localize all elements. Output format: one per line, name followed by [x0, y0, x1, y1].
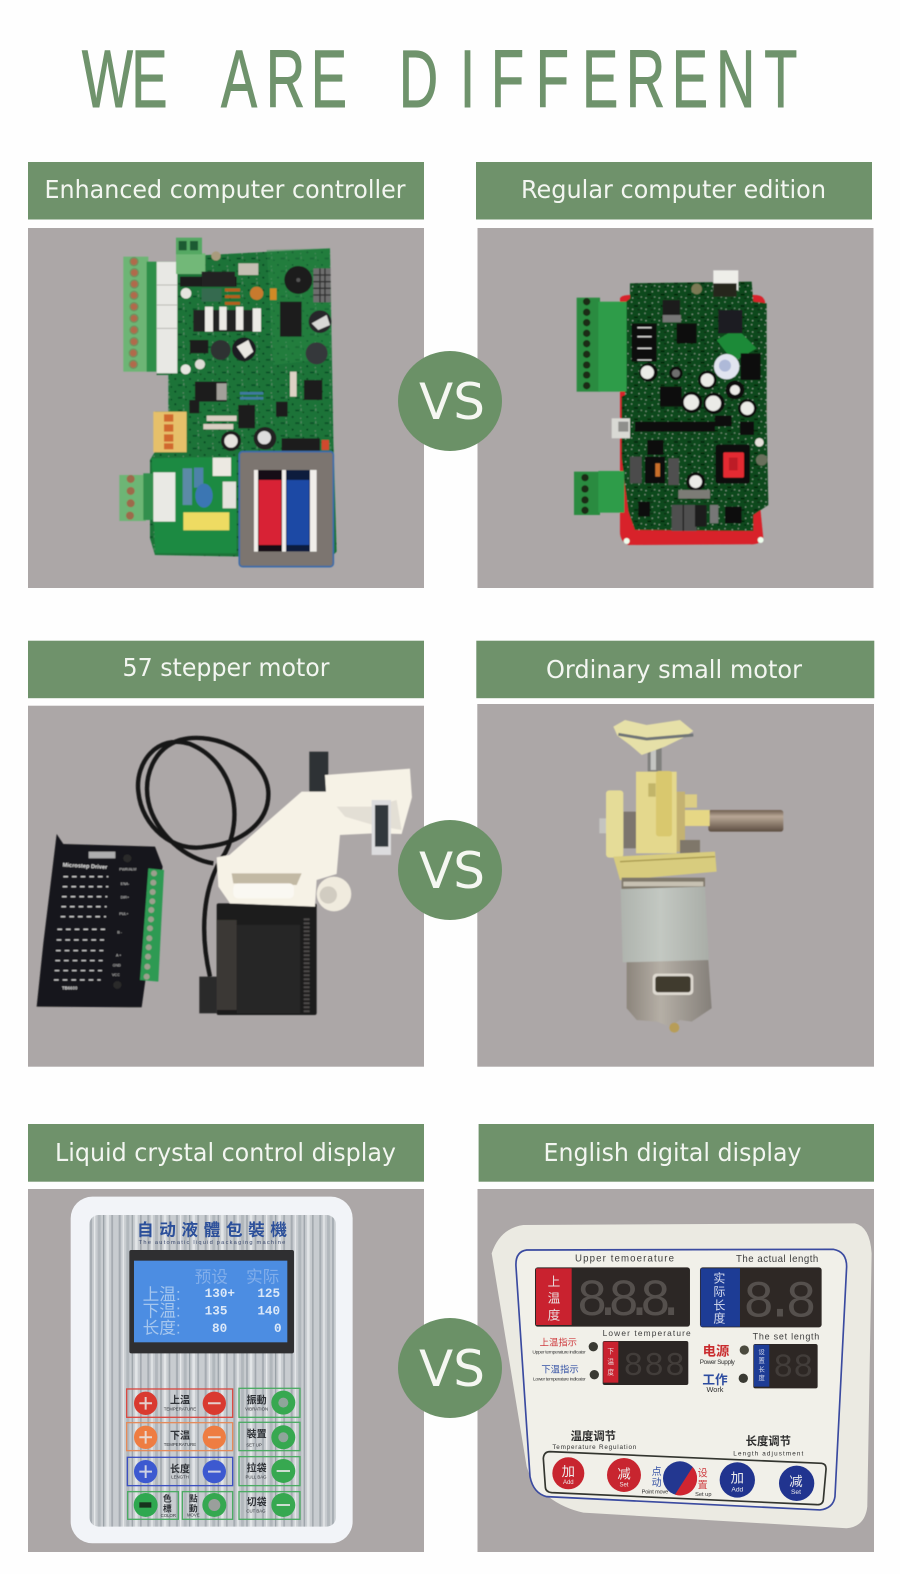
- adjustment buttons: Set up: [695, 1492, 711, 1498]
- header: Ordinary small motor: Ordinary small motor: [546, 655, 803, 684]
- panel: enhanced controller photo background: [28, 228, 424, 588]
- adjustment buttons: Set: [791, 1489, 801, 1496]
- icon: ordinary small motor: [599, 720, 783, 1033]
- actual length display: The actual length: [736, 1254, 818, 1265]
- VS badge row 1: [398, 351, 502, 451]
- lower temperature display: 温: [607, 1357, 614, 1366]
- header: Regular computer edition: Regular computer edition: [521, 175, 826, 204]
- panel: LCD photo background: [28, 1189, 424, 1552]
- actual length display: 实: [713, 1271, 725, 1286]
- LCD control panel: [71, 1197, 353, 1543]
- LCD screen: 长度:: [143, 1319, 181, 1338]
- actual length display: 际: [713, 1285, 725, 1299]
- panel: stepper motor photo background: [28, 706, 424, 1067]
- digital display panel: [492, 1223, 872, 1528]
- LCD buttons: 长度: [170, 1462, 190, 1475]
- panel: small motor photo background: [477, 704, 874, 1067]
- LCD buttons: 下温: [170, 1429, 190, 1442]
- VS badge row 1: VS: [419, 373, 485, 431]
- LCD screen: 125: [257, 1286, 280, 1301]
- header: Enhanced computer controller: [28, 162, 424, 220]
- adjustment buttons: Point move: [642, 1490, 668, 1496]
- adjustment labels: 长度调节: [746, 1434, 791, 1448]
- set length display: 长: [758, 1364, 765, 1373]
- VS badge row 3: VS: [419, 1340, 485, 1398]
- indicator labels: [532, 1336, 749, 1394]
- actual length display: 长: [713, 1298, 725, 1312]
- header: Regular computer edition: [476, 162, 872, 220]
- stepper driver: Microstep Driver: [63, 863, 108, 871]
- adjustment buttons: 点: [652, 1466, 662, 1478]
- header: 57 stepper motor: 57 stepper motor: [122, 653, 330, 682]
- set length display: 置: [758, 1357, 765, 1365]
- adjustment buttons: 减: [789, 1474, 803, 1489]
- lower temperature display: 888: [623, 1348, 685, 1386]
- LCD buttons: SET UP: [246, 1442, 262, 1447]
- LCD buttons: 色: [163, 1493, 172, 1504]
- lower temperature display: Lower temperature: [603, 1328, 691, 1338]
- indicator labels: Lower temperature indicator: [533, 1377, 586, 1383]
- VS badge row 2: VS: [419, 842, 485, 900]
- VS badge row 3: [398, 1318, 502, 1418]
- motor cable: [138, 738, 268, 977]
- lower temperature display: 度: [607, 1368, 614, 1377]
- LCD screen: 预设: [195, 1267, 228, 1286]
- stepper driver: A +: [116, 954, 121, 958]
- icon: regular circuit board: [574, 270, 768, 545]
- header: Enhanced computer controller: Enhanced computer controller: [44, 175, 406, 204]
- indicator labels: Work: [706, 1385, 724, 1394]
- LCD screen: 130+: [205, 1286, 235, 1301]
- stepper driver: ENA-: [121, 882, 130, 886]
- LCD buttons: [127, 1388, 300, 1519]
- panel: regular controller photo background: [478, 228, 874, 588]
- indicator labels: 电源: [703, 1343, 730, 1358]
- LCD buttons: 切袋: [247, 1496, 267, 1509]
- adjustment buttons: [543, 1452, 826, 1505]
- stepper driver: GND: [113, 964, 121, 968]
- LCD screen: 0: [274, 1321, 282, 1336]
- header: Ordinary small motor: [476, 641, 874, 698]
- LCD buttons: 上温: [170, 1393, 190, 1406]
- stepper motor body: [199, 903, 317, 1015]
- LCD buttons: MOVE: [187, 1512, 200, 1517]
- header: Liquid crystal control display: [28, 1124, 424, 1182]
- LCD buttons: TEMPERATURE: [164, 1407, 196, 1412]
- upper temperature display: 8.8.8.: [577, 1272, 687, 1331]
- LCD buttons: 動: [189, 1503, 198, 1514]
- panel: digital display photo background: [478, 1189, 874, 1552]
- LCD buttons: COLOR: [161, 1513, 176, 1518]
- LCD buttons: 標: [163, 1503, 172, 1514]
- LCD buttons: TEMPERATURE: [164, 1442, 196, 1447]
- LCD buttons: VIBRATION: [245, 1407, 268, 1412]
- stepper driver: PWR/ALM: [119, 868, 136, 872]
- adjustment buttons: 置: [698, 1479, 708, 1491]
- stepper driver: B -: [117, 930, 123, 934]
- indicator labels: 上温指示: [540, 1336, 577, 1347]
- indicator labels: Power Supply: [700, 1359, 736, 1366]
- LCD screen: 下温:: [143, 1302, 181, 1321]
- adjustment buttons: 设: [698, 1468, 708, 1480]
- adjustment buttons: Add: [731, 1487, 744, 1494]
- LCD buttons: LENGTH: [171, 1474, 189, 1479]
- adjustment buttons: 动: [652, 1477, 662, 1489]
- LCD buttons: PULL BAG: [245, 1474, 267, 1479]
- icon: stepper motor with driver: [37, 738, 412, 1015]
- LCD buttons: 拉袋: [247, 1462, 267, 1475]
- stepper driver: DIR+: [121, 895, 129, 899]
- stepper driver: VCC: [112, 973, 120, 977]
- LCD buttons: 振動: [247, 1393, 267, 1406]
- stepper driver: TB6600: [62, 985, 78, 990]
- set length display: 88: [773, 1350, 813, 1388]
- stepper driver: [37, 834, 164, 1007]
- LCD screen: 135: [205, 1304, 227, 1319]
- adjustment buttons: 加: [562, 1464, 575, 1479]
- adjustment labels: 温度调节: [571, 1429, 616, 1443]
- indicator labels: 工作: [702, 1373, 728, 1387]
- LCD buttons: CUT BAG: [246, 1508, 266, 1513]
- stepper driver: PUL+: [119, 912, 129, 916]
- indicator labels: Upper temperature indicator: [532, 1349, 586, 1355]
- adjustment buttons: 减: [617, 1466, 631, 1481]
- adjustment labels: Temperature Regulation: [552, 1444, 637, 1451]
- LCD screen: 实际: [246, 1267, 279, 1286]
- header: English digital display: [479, 1124, 874, 1182]
- LCD panel title: The automatic liquid packaging machine: [139, 1240, 285, 1246]
- upper temperature display: 度: [548, 1307, 561, 1322]
- lower temperature display: 下: [607, 1347, 614, 1355]
- white bracket and gears: [217, 752, 412, 911]
- upper temperature display: 温: [548, 1292, 561, 1306]
- indicator labels: 下温指示: [541, 1364, 579, 1375]
- LCD panel title: 自动液體包裝機: [137, 1220, 287, 1240]
- adjustment buttons: Add: [563, 1480, 574, 1486]
- header: English digital display: English digital display: [544, 1138, 802, 1167]
- upper temperature display: 上: [548, 1275, 561, 1289]
- set length display: 设: [758, 1347, 765, 1356]
- LCD buttons: 裝置: [247, 1428, 267, 1441]
- set length display: The set length: [753, 1331, 819, 1341]
- adjustment buttons: Set: [619, 1483, 629, 1489]
- actual length display: [700, 1254, 822, 1333]
- header: 57 stepper motor: [28, 641, 424, 698]
- LCD buttons: 點: [189, 1493, 198, 1504]
- adjustment labels: [552, 1429, 804, 1458]
- actual length display: 度: [713, 1311, 725, 1326]
- set length display: [753, 1331, 819, 1388]
- header: Liquid crystal control display: Liquid crystal control display: [55, 1138, 396, 1167]
- adjustment labels: Length adjustment: [733, 1451, 804, 1458]
- LCD screen: 80: [212, 1321, 227, 1336]
- LCD screen: [129, 1250, 294, 1353]
- upper temperature display: [535, 1254, 690, 1331]
- LCD screen: 140: [257, 1304, 280, 1319]
- actual length display: 8.8: [743, 1274, 817, 1333]
- VS badge row 2: [398, 820, 502, 920]
- lower temperature display: [603, 1328, 691, 1386]
- icon: enhanced circuit board: [119, 238, 337, 567]
- adjustment buttons: 加: [731, 1471, 744, 1486]
- set length display: 度: [758, 1373, 765, 1382]
- LCD screen: 上温:: [143, 1285, 181, 1304]
- upper temperature display: Upper temoerature: [575, 1254, 674, 1265]
- title: WE ARE DIFFERENT: [82, 33, 797, 125]
